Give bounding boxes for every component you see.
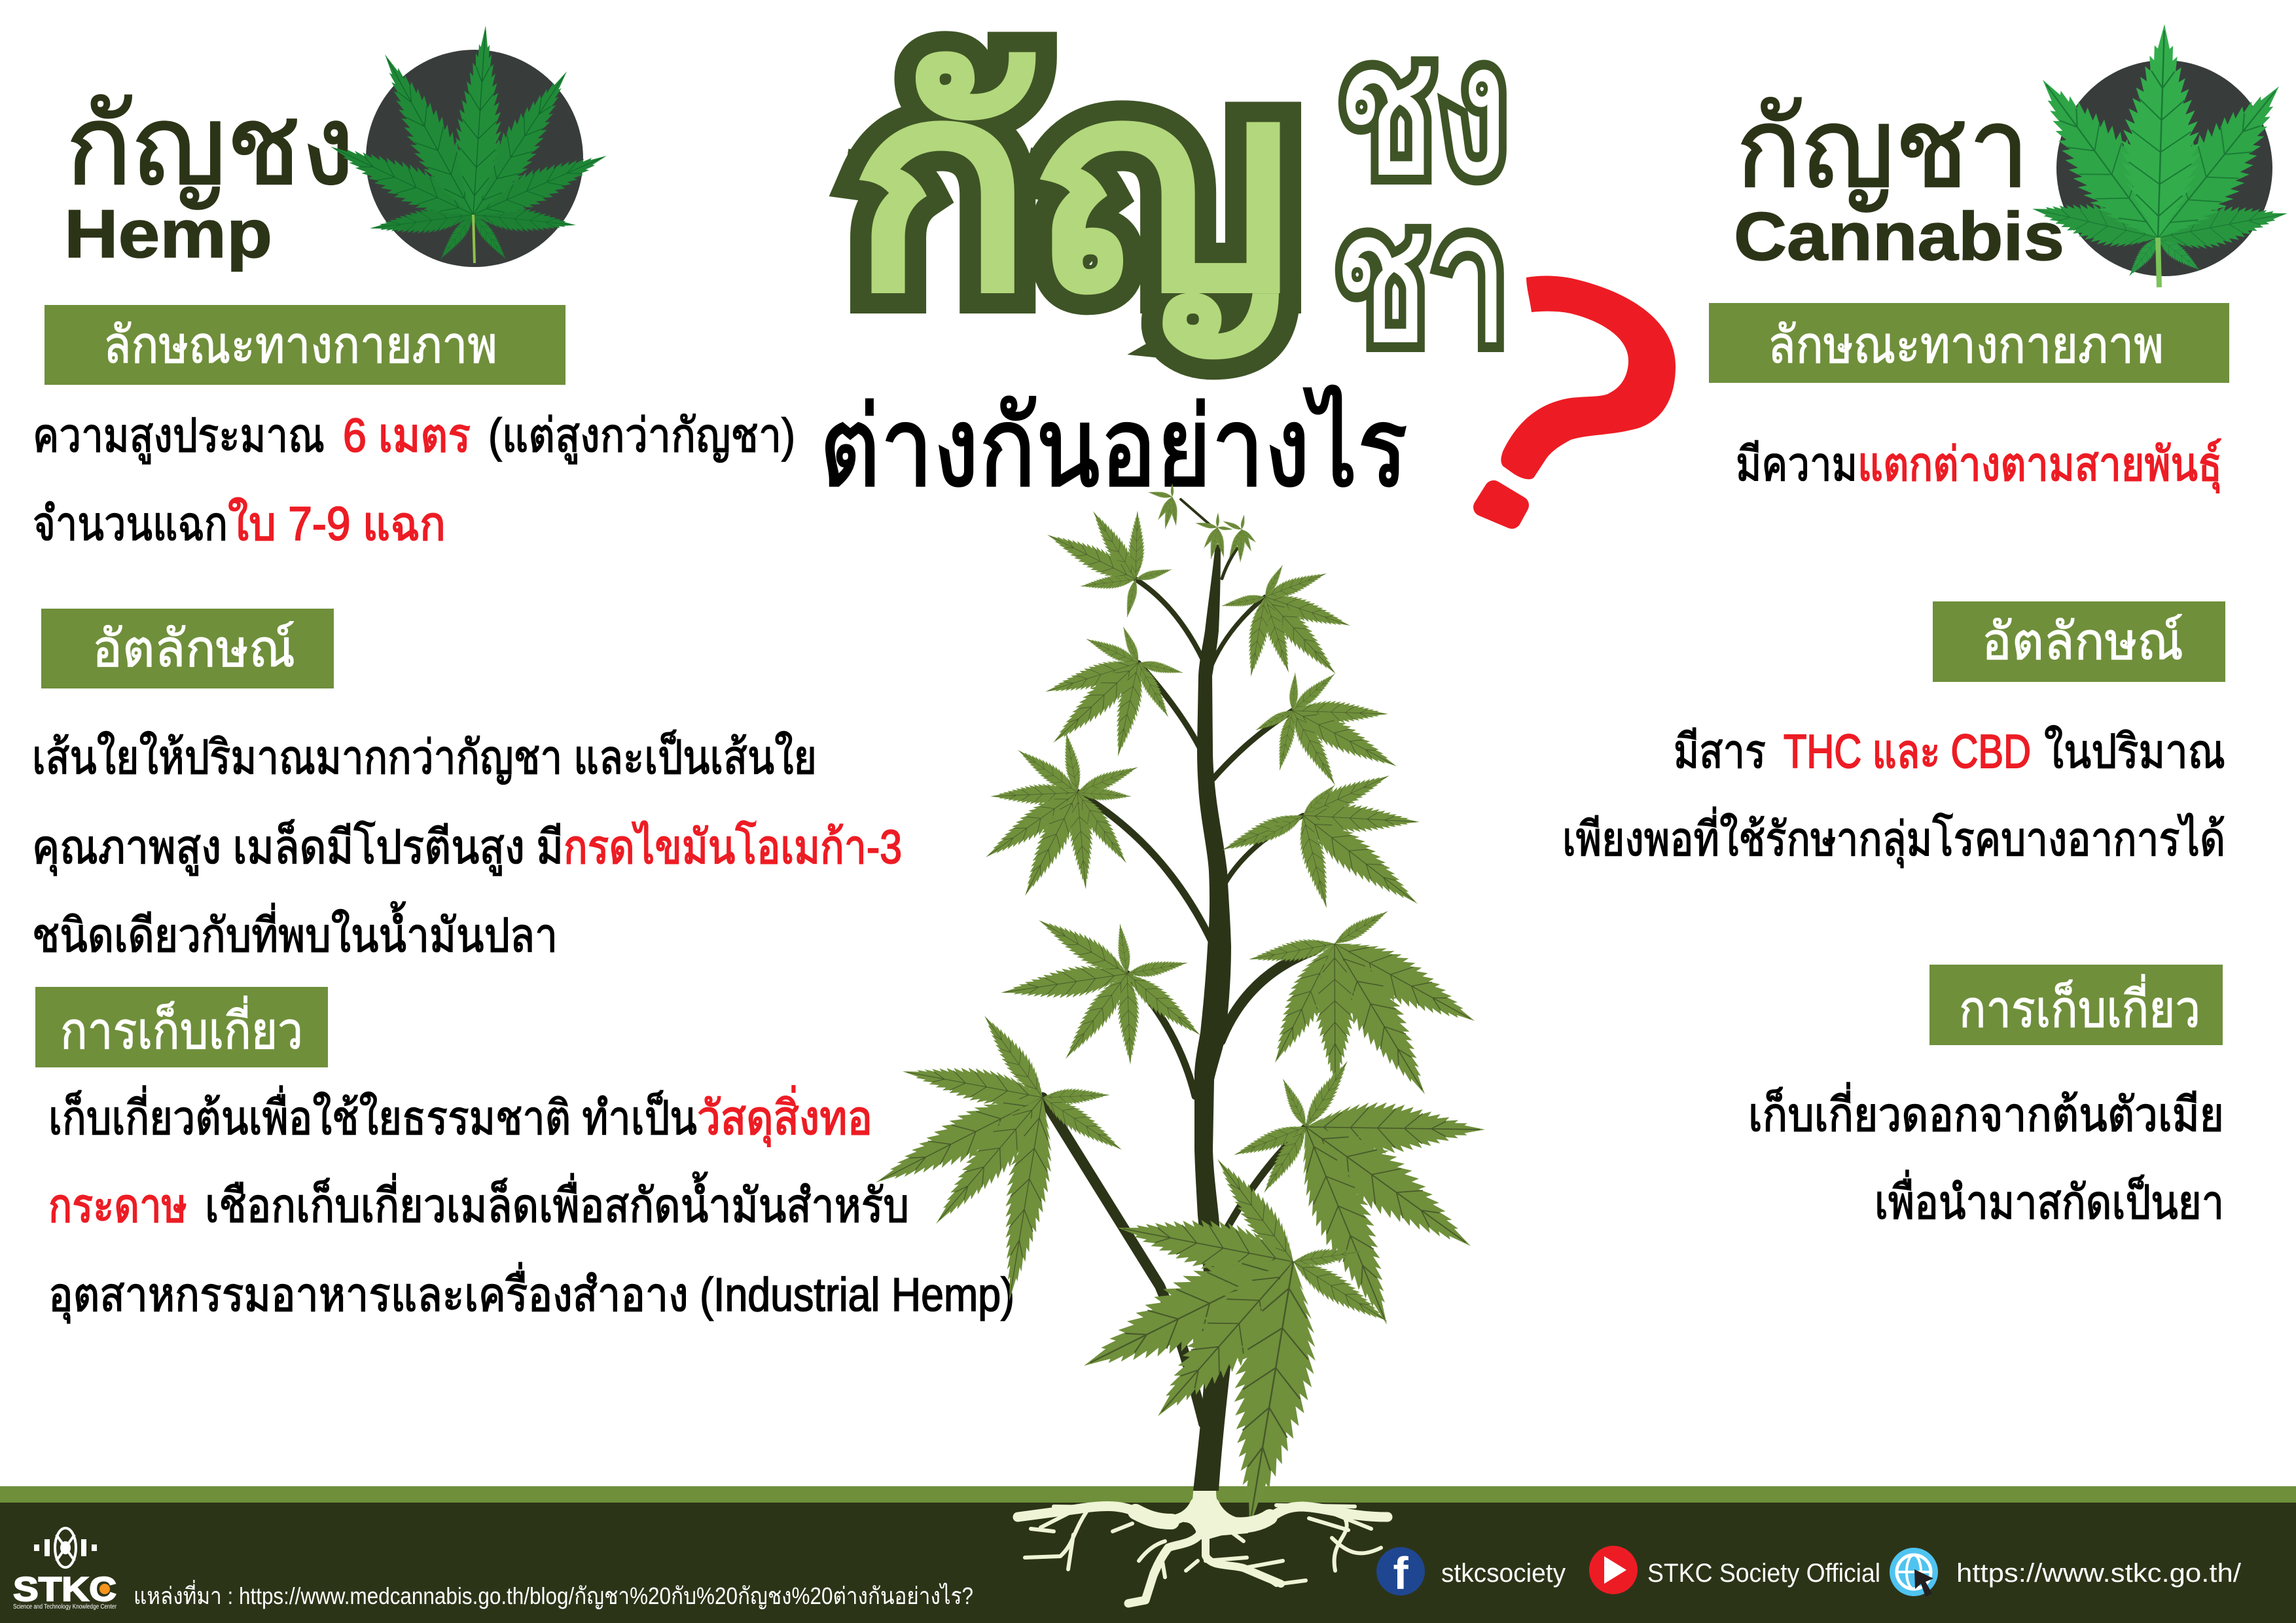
text: harvest line 3: อุตสาหกรรมอาหารและเครื่องสำอาง (Industrial Hemp) <box>48 1262 1014 1323</box>
panel: hemp identity <box>32 609 902 962</box>
icon: website globe <box>1890 1548 1938 1597</box>
panel: cannabis physical traits <box>1709 303 2229 493</box>
text: fibre line 3: ชนิดเดียวกับที่พบในน้ำมันปลา <box>32 901 558 962</box>
footer source text: แหล่งที่มา : https://www.medcannabis.go.th/blog/กัญชา%20กับ%20กัญชง%20ต่างกันอย่างไร? <box>134 1580 973 1609</box>
text: THC CBD <box>1674 725 2225 778</box>
heading bar <box>45 305 565 385</box>
text: harvest line 1: เก็บเกี่ยวต้นเพื่อใช้ใยธรรมชาติ ทำเป็น <box>48 1086 697 1145</box>
panel: cannabis identity <box>1562 601 2225 868</box>
text: height: 6 เมตร <box>343 410 471 462</box>
heading bar <box>1709 303 2229 383</box>
text: height: ความสูงประมาณ <box>33 410 325 464</box>
plant roots <box>1018 1491 1388 1603</box>
leaf: right D <box>1253 668 1403 791</box>
text: harvest line 2 <box>48 1171 909 1232</box>
text: THC CBD: มีสาร <box>1674 726 1766 778</box>
icon: youtube play <box>1589 1546 1638 1594</box>
heading text: การเก็บเกี่ยว <box>60 996 303 1060</box>
dark circle behind cannabis leaf <box>2056 60 2272 276</box>
dark circle behind hemp leaf <box>366 50 583 267</box>
text: harvest line 1: เก็บเกี่ยวดอกจากต้นตัวเมีย <box>1748 1082 2224 1141</box>
text: THC CBD: ในปริมาณ <box>2044 725 2225 778</box>
icon: hemp leaf <box>323 24 614 263</box>
heading text: การเก็บเกี่ยว <box>1959 974 2200 1038</box>
heading text: ลักษณะทางกายภาพ <box>103 316 497 374</box>
subtitle: ต่างกันอย่างไร <box>819 385 1408 510</box>
text: height: (แต่สูงกว่ากัญชา) <box>488 410 795 464</box>
text: fibre line 2 <box>32 819 902 876</box>
icon: cannabis leaf <box>2015 23 2296 287</box>
footer logo: STKC <box>13 1528 117 1611</box>
heading text: อัตลักษณ์ <box>1982 613 2183 670</box>
plant illustration <box>865 483 1488 1603</box>
hemp title latin: Hemp <box>64 196 272 272</box>
cannabis title thai: กัญชา <box>1736 86 2030 212</box>
text: fibre line 2: กรดไขมันโอเมก้า-3 <box>564 820 902 874</box>
logo tagline: Science and Technology Knowledge Center <box>13 1603 117 1611</box>
leaf: upper left A <box>1042 506 1174 619</box>
leaf: left C <box>1042 624 1185 759</box>
plant stems <box>1043 499 1314 1491</box>
main title: ชง: ชง <box>1336 5 1509 215</box>
text: height <box>33 410 795 464</box>
text: harvest line 1: วัสดุสิ่งทอ <box>697 1086 872 1147</box>
text: varies by strain: แตกต่างตามสายพันธุ์ <box>1857 438 2222 493</box>
leaf: right H <box>1247 904 1486 1107</box>
text: harvest line 2: เชือกเก็บเกี่ยวเมล็ดเพื่อสกัดน้ำมันสำหรับ <box>205 1171 909 1232</box>
panel: cannabis title block <box>1734 23 2296 287</box>
panel: cannabis harvest <box>1748 965 2224 1229</box>
main title: กัญ: กัญ <box>848 26 1293 361</box>
heading text: อัตลักษณ์ <box>92 620 295 677</box>
panel: hemp harvest <box>35 987 1014 1323</box>
text: leaflets: ใบ 7-9 แฉก <box>228 497 446 550</box>
leaf: upper right B <box>1220 563 1354 683</box>
heading bar <box>1933 601 2225 682</box>
text: fibre line 2: คุณภาพสูง เมล็ดมีโปรตีนสูง มี <box>32 819 564 876</box>
text: leaflets <box>33 497 446 550</box>
icon: facebook <box>1376 1547 1425 1599</box>
text: facebook name: stkcsociety <box>1441 1559 1566 1588</box>
text: harvest line 2: กระดาษ <box>48 1180 187 1232</box>
text: varies by strain <box>1736 438 2222 493</box>
panel: hemp title block <box>64 24 614 272</box>
main title: ชา: ชา <box>1333 173 1510 382</box>
text: leaflets: จำนวนแฉก <box>33 498 228 550</box>
text: youtube name: STKC Society Official <box>1647 1559 1880 1588</box>
icon: question mark <box>1482 276 1676 520</box>
leaf: left E <box>978 731 1141 902</box>
leaf: right F <box>1218 765 1428 918</box>
text: website url: https://www.stkc.go.th/ <box>1956 1559 2242 1588</box>
heading bar <box>41 609 334 688</box>
heading bar <box>35 987 328 1067</box>
text: THC CBD: THC และ CBD <box>1784 726 2031 778</box>
cannabis title latin: Cannabis <box>1734 199 2064 275</box>
text: harvest line 2: เพื่อนำมาสกัดเป็นยา <box>1874 1170 2224 1229</box>
text: varies by strain: มีความ <box>1736 438 1857 491</box>
leaf: lower centre K <box>1067 1150 1395 1533</box>
heading text: ลักษณะทางกายภาพ <box>1768 316 2164 374</box>
hemp title thai: กัญชง <box>65 84 355 209</box>
heading bar <box>1929 965 2223 1045</box>
leaf: left G <box>999 910 1208 1066</box>
leaf: right I <box>1230 1056 1488 1335</box>
leaf: lower left J <box>865 1008 1128 1304</box>
logo orange dot <box>99 1584 110 1594</box>
text: fibre line 1: เส้นใยให้ปริมาณมากกว่ากัญชา และเป็นเส้นใย <box>32 730 817 784</box>
footer band <box>0 1486 2296 1623</box>
logo wordmark: STKC <box>13 1571 117 1609</box>
leaf: top small cluster <box>1147 483 1257 563</box>
logo emblem <box>37 1528 94 1567</box>
icon: facebook: f <box>1393 1548 1408 1599</box>
panel: hemp physical traits <box>33 305 795 550</box>
